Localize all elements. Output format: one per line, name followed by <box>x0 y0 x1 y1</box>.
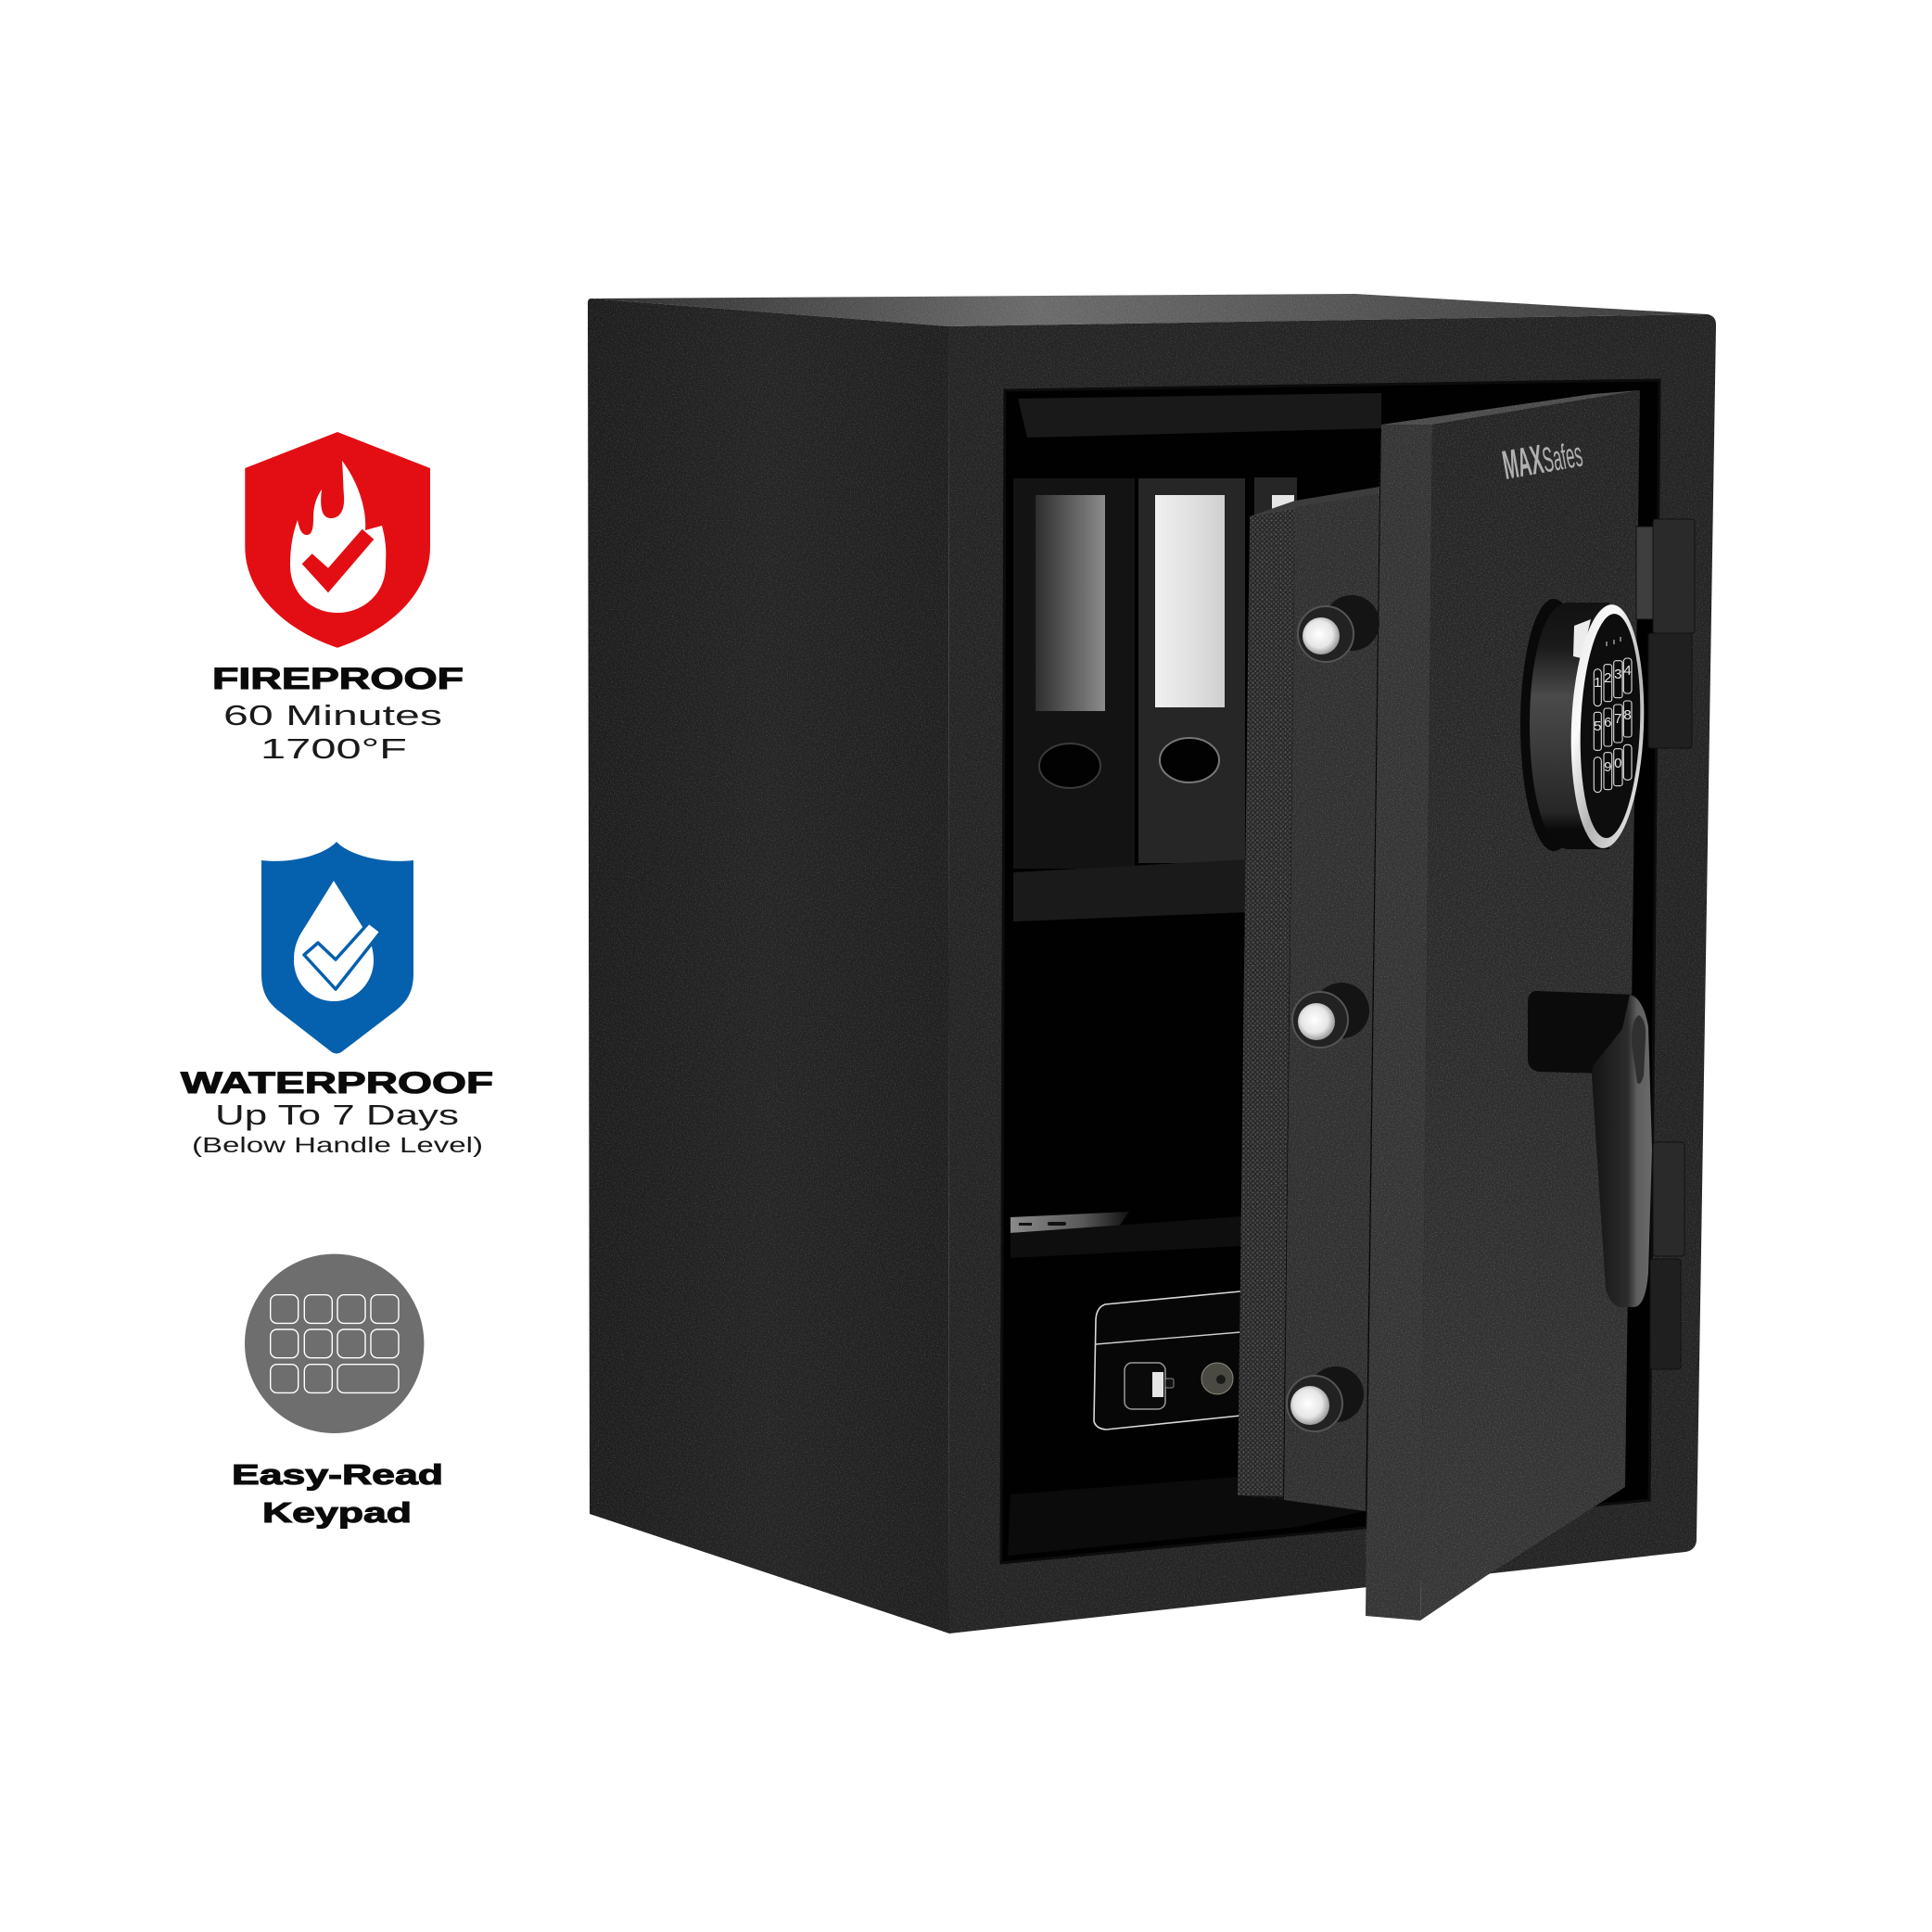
binder left <box>1013 478 1135 869</box>
top rail <box>1018 393 1381 438</box>
icon: fireproof shield <box>245 432 430 648</box>
drawer lockbox <box>1094 1291 1240 1430</box>
handle inset <box>1632 1015 1646 1084</box>
safe top face <box>591 294 1708 326</box>
keypad keys <box>1594 658 1632 793</box>
keypad digits: 6 <box>1604 715 1611 731</box>
keypad digits: 4 <box>1623 663 1632 679</box>
heading: Keypad: Keypad <box>262 1496 412 1529</box>
text: 1700°F: 1700°F <box>261 732 407 765</box>
text: waterproof <box>181 1066 493 1157</box>
safe front frame <box>948 314 1716 1633</box>
texture: shell grain <box>588 294 1717 1634</box>
keypad digits: 1 <box>1594 675 1601 691</box>
icon: check mark <box>304 922 381 989</box>
keypad digits: 7 <box>1614 711 1621 727</box>
text: below handle level: (Below Handle Level) <box>192 1133 483 1157</box>
text: fireproof <box>212 662 464 765</box>
safe illustration <box>588 294 1717 1634</box>
lock chrome ring <box>1567 604 1648 849</box>
keypad digits: 5 <box>1594 718 1601 734</box>
lock shadow ring <box>1520 599 1587 851</box>
door fabric seal <box>1238 507 1295 1496</box>
keypad digits: 3 <box>1614 667 1621 682</box>
lock chrome highlight <box>1573 619 1591 658</box>
electronic lock <box>1520 599 1648 851</box>
icon: flame <box>290 461 386 613</box>
door <box>1238 390 1640 1621</box>
bottom sill <box>1008 1477 1372 1556</box>
bolt top <box>1298 595 1379 662</box>
lock face <box>1576 613 1645 839</box>
text: 60 Minutes: 60 Minutes <box>223 699 442 731</box>
interior opening <box>1001 380 1659 1563</box>
binder right <box>1254 477 1297 528</box>
keypad digits: 9 <box>1604 759 1611 775</box>
bolt middle <box>1292 983 1369 1048</box>
hinge upper <box>1636 519 1695 748</box>
keypad digits: 0 <box>1614 756 1621 771</box>
handle lever <box>1592 995 1652 1307</box>
texture: door grain <box>1238 390 1640 1628</box>
icon: water drop <box>294 881 374 1001</box>
phone <box>1010 1212 1129 1233</box>
text: Up To 7 Days: Up To 7 Days <box>215 1099 459 1131</box>
heading: Easy-Read: Easy-Read <box>232 1458 443 1491</box>
handle <box>1528 991 1652 1307</box>
indicator lights <box>1606 637 1621 646</box>
lock body <box>1530 603 1609 849</box>
door inner panel <box>1284 493 1379 1511</box>
text: easy-read keypad <box>232 1458 443 1529</box>
felt shelf <box>1013 859 1247 922</box>
bolt bottom <box>1287 1366 1364 1431</box>
safe left side panel <box>588 299 949 1633</box>
heading: WATERPROOF: WATERPROOF <box>181 1066 493 1099</box>
handle base <box>1528 991 1636 1074</box>
icon: keypad <box>245 1254 424 1433</box>
door inner top <box>1250 487 1379 516</box>
icon: red check mark <box>302 529 374 592</box>
binder middle <box>1138 478 1245 863</box>
door edge <box>1366 425 1432 1621</box>
icon: waterproof shield <box>261 842 413 1053</box>
keypad digits <box>1594 663 1632 775</box>
logo: MAXSafes <box>1499 430 1585 489</box>
hinge lower <box>1650 1142 1684 1369</box>
lower shelf <box>1010 1216 1242 1258</box>
keypad digits: 2 <box>1604 670 1611 686</box>
keypad digits: 8 <box>1623 707 1632 723</box>
heading: FIREPROOF: FIREPROOF <box>212 662 464 695</box>
door front face <box>1420 390 1640 1621</box>
door top <box>1381 390 1640 425</box>
